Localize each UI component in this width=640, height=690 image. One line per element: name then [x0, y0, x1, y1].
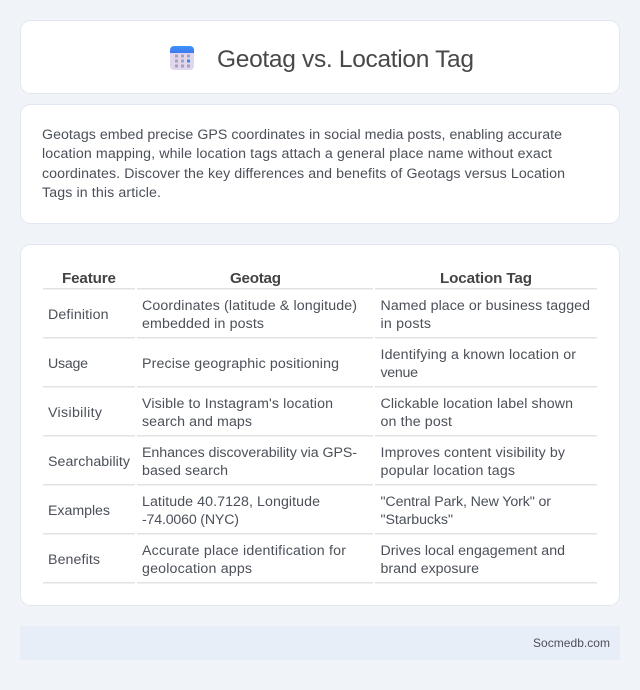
- panel: comparison table card: [20, 244, 620, 606]
- panel: description card: [20, 104, 620, 224]
- row: Benefits: Drives local engagement and: [380, 543, 565, 559]
- row: Visibility: Clickable location label shown: [380, 396, 573, 412]
- row: Searchability: Searchability: [48, 454, 131, 470]
- row: Visibility: search and maps: [142, 414, 252, 430]
- panel: title card: [20, 20, 620, 94]
- row: Benefits: geolocation apps: [142, 561, 252, 577]
- row: Examples: Examples: [48, 503, 110, 519]
- table header: Geotag: [230, 270, 281, 287]
- table header: Location Tag: [440, 270, 532, 287]
- row: Visibility: Visibility: [48, 405, 103, 421]
- table header: [62, 270, 532, 287]
- icon: calendar: [170, 46, 194, 70]
- row: Definition: embedded in posts: [142, 316, 264, 332]
- row: Examples: [48, 494, 551, 528]
- row: Searchability: based search: [142, 463, 228, 479]
- row: Usage: Precise geographic positioning: [142, 356, 339, 372]
- description text: location mapping, while location tags attach a general place name without exact: [42, 146, 552, 162]
- row: Examples: "Central Park, New York" or: [380, 494, 551, 510]
- row: Examples: "Starbucks": [380, 512, 453, 528]
- row: Definition: Definition: [48, 307, 108, 323]
- row: Usage: [48, 347, 576, 381]
- row: Usage: venue: [380, 365, 418, 381]
- row: Visibility: [48, 396, 573, 430]
- row: Benefits: [48, 543, 565, 577]
- row: Usage: Usage: [48, 356, 88, 372]
- row: Visibility: Visible to Instagram's location: [142, 396, 333, 412]
- row: Examples: Latitude 40.7128, Longitude: [142, 494, 320, 510]
- row: Searchability: Enhances discoverability via GPS-: [142, 445, 357, 461]
- description text: [42, 127, 565, 201]
- row: Benefits: Benefits: [48, 552, 100, 568]
- row: Searchability: popular location tags: [380, 463, 515, 479]
- row: Definition: Coordinates (latitude & longitude): [142, 298, 357, 314]
- row: Definition: [48, 298, 590, 332]
- row: Searchability: [48, 445, 566, 479]
- description text: Tags in this article.: [42, 185, 161, 201]
- row: Examples: -74.0060 (NYC): [142, 512, 239, 528]
- row: Usage: Identifying a known location or: [380, 347, 576, 363]
- row: Benefits: Accurate place identification for: [142, 543, 346, 559]
- row: Benefits: brand exposure: [380, 561, 479, 577]
- row: Visibility: on the post: [380, 414, 452, 430]
- footer bar: [20, 626, 620, 660]
- row: Searchability: Improves content visibility by: [380, 445, 566, 461]
- row: Definition: in posts: [380, 316, 431, 332]
- row: Definition: Named place or business tagged: [380, 298, 590, 314]
- description text: Geotags embed precise GPS coordinates in social media posts, enabling accurate: [42, 127, 562, 143]
- table rules: [43, 288, 597, 584]
- title: Geotag vs. Location Tag: [217, 46, 474, 73]
- description text: coordinates. Discover the key differences and benefits of Geotags versus Location: [42, 166, 565, 182]
- table header: Feature: [62, 270, 116, 287]
- footer credit: Socmedb.com: [533, 636, 610, 650]
